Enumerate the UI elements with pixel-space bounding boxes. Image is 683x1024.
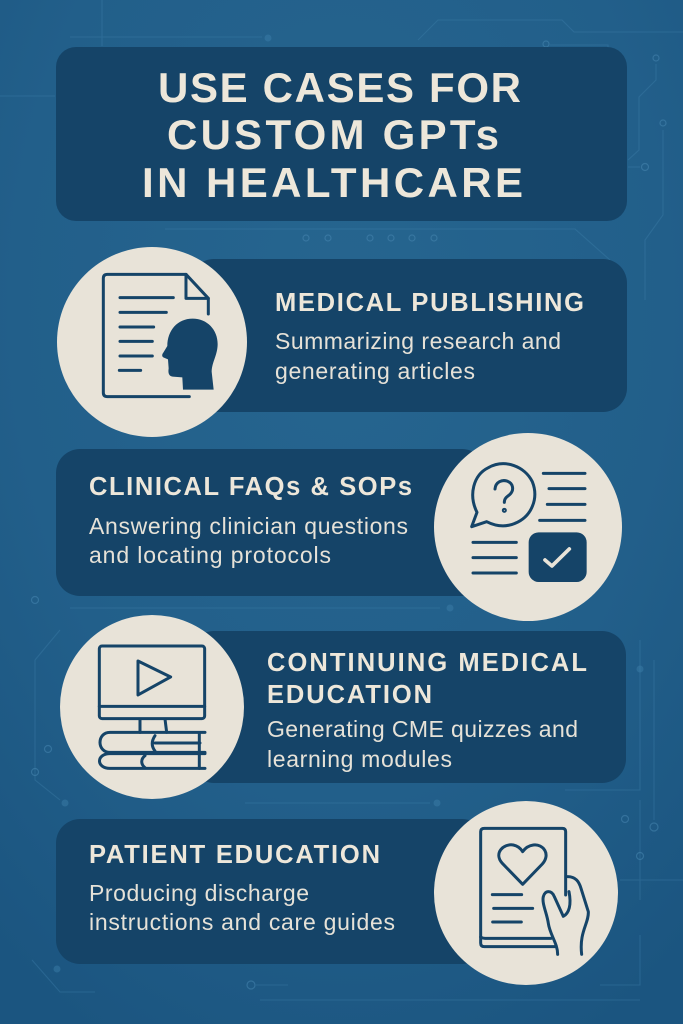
heading: patient education: PATIENT EDUCATION [89,841,380,869]
text: continuing medical education description: Generating CME quizzes and [267,716,578,742]
icon circle: question and checklist [434,433,622,621]
panel: continuing medical education [60,615,626,799]
icon circle: video and books [60,615,244,799]
icon circle: booklet and hand [434,801,618,985]
icon: booklet and hand [481,828,588,954]
panel: clinical FAQs [56,433,622,621]
text: patient education description: instructions and care guides [89,909,395,935]
heading: medical publishing: MEDICAL PUBLISHING [275,289,584,317]
text: medical publishing description: Summarizing research and [275,328,561,354]
panel: medical publishing [57,247,627,437]
text: clinical FAQs description: and locating protocols [89,542,331,568]
heading: continuing medical education: EDUCATION [267,681,432,709]
icon: document with head [103,274,218,397]
panel: title [56,47,627,221]
panel: patient education [56,801,618,985]
heading: title line 1: USE CASES FOR [158,64,521,111]
icon circle: document with head [57,247,247,437]
icon: question and checklist [472,464,587,582]
heading: title line 3: IN HEALTHCARE [142,159,523,206]
heading: clinical FAQs: CLINICAL FAQs & SOPs [89,473,412,501]
icon: video and books [99,646,205,768]
text: continuing medical education description: learning modules [267,746,452,772]
text: clinical FAQs description: Answering clinician questions [89,513,408,539]
text: patient education description: Producing discharge [89,880,309,906]
heading: continuing medical education: CONTINUING MEDICAL [267,649,587,677]
text: medical publishing description: generating articles [275,358,475,384]
heading: title line 2: CUSTOM GPTs [167,111,499,158]
